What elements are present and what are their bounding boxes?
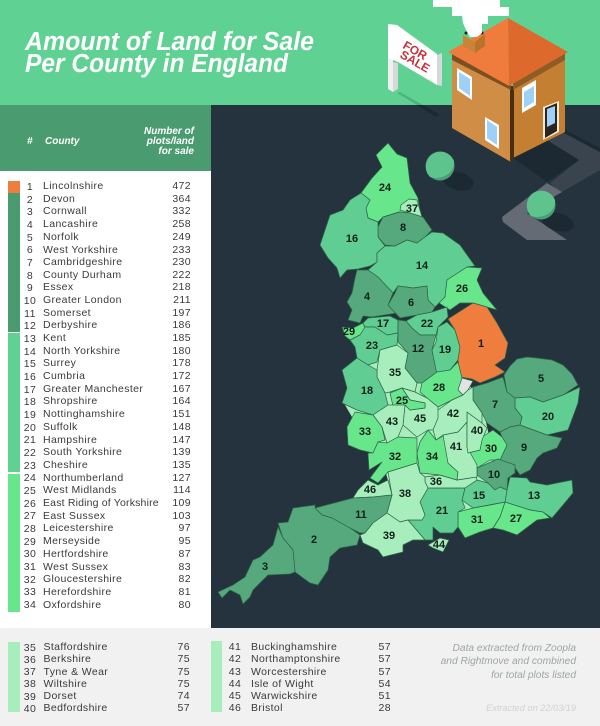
- header band: [0, 0, 600, 105]
- county rows 1 to 34: 97: [179, 522, 191, 534]
- county rows 1 to 34: East Sussex: [43, 510, 106, 522]
- county 31 West Sussex: [458, 502, 505, 538]
- county rows 1 to 34: 364: [172, 193, 191, 205]
- county 4 Lancashire: [347, 270, 397, 323]
- windows and door: [457, 68, 559, 149]
- table header: #: [27, 136, 33, 147]
- county 36 Berkshire: [425, 473, 477, 488]
- Rutland, no data: [458, 378, 473, 395]
- county 8 County Durham: 8: [400, 222, 406, 234]
- county rows 41 to 46: 57: [379, 641, 391, 653]
- county rows 1 to 34: 21: [24, 434, 36, 446]
- footer colour bar right: [211, 641, 222, 712]
- sign lettering: FOR: [401, 38, 430, 63]
- county 8 County Durham: [378, 212, 432, 246]
- county 18 Shropshire: [342, 358, 388, 415]
- county 12 Derbyshire: [398, 320, 437, 383]
- county rows 41 to 46: Northamptonshire: [251, 653, 341, 665]
- county rows 41 to 46: 57: [379, 653, 391, 665]
- county 2 Devon: 2: [311, 534, 317, 546]
- county 43 Worcestershire: [373, 405, 405, 443]
- county rows 1 to 34: 10: [24, 295, 36, 307]
- county 45 Warwickshire: [402, 388, 438, 437]
- county rows 35 to 40: Dorset: [44, 690, 77, 702]
- county 11 Somerset: 11: [355, 509, 367, 521]
- county 39 Dorset: 39: [383, 530, 395, 542]
- county 1 Lincolnshire: 1: [478, 338, 484, 350]
- county 20 Suffolk: [515, 387, 580, 435]
- county 44 Isle of Wight: 44: [433, 539, 446, 551]
- county 29 Merseyside: 29: [343, 326, 355, 338]
- for sale sign: [388, 24, 442, 92]
- county rows 1 to 34: 29: [24, 536, 36, 548]
- county 24 Northumberland: 24: [379, 182, 392, 194]
- county rows 1 to 34: 332: [172, 205, 191, 217]
- county rows 1 to 34: West Midlands: [43, 484, 117, 496]
- county 28 Leicestershire: [420, 362, 463, 407]
- county rows 35 to 40: Staffordshire: [44, 641, 108, 653]
- county rows 1 to 34: 114: [173, 484, 191, 496]
- county 13 Kent: [505, 477, 573, 518]
- county 21 Hampshire: 21: [436, 505, 448, 517]
- county 41 Buckinghamshire: 41: [450, 441, 462, 453]
- table header: County: [45, 136, 80, 147]
- county 12 Derbyshire: 12: [412, 343, 424, 355]
- county 44 Isle of Wight: [428, 538, 449, 552]
- county rows 1 to 34: 164: [172, 395, 191, 407]
- illustration: house with for sale sign: [388, 0, 600, 240]
- county rows 1 to 34: 172: [172, 370, 191, 382]
- county rows 41 to 46: 54: [379, 678, 391, 690]
- county 3 Cornwall: 3: [262, 561, 268, 573]
- county rows 1 to 34: 8: [27, 270, 33, 282]
- county rows 1 to 34: 33: [24, 586, 36, 598]
- county rows 1 to 34: 148: [172, 421, 191, 433]
- county 42 Northamptonshire: 42: [447, 408, 459, 420]
- table header: plots/land: [146, 136, 195, 147]
- county rows 1 to 34: 185: [172, 332, 191, 344]
- county rows 1 to 34: 16: [24, 371, 36, 383]
- county rows 1 to 34: County Durham: [43, 269, 121, 281]
- county 9 Essex: 9: [521, 442, 527, 454]
- county rows 41 to 46: 42: [229, 653, 241, 665]
- county 35 Staffordshire: 35: [389, 367, 401, 379]
- county rows 35 to 40: 75: [178, 678, 190, 690]
- county rows 1 to 34: 222: [172, 269, 191, 281]
- county rows 1 to 34: 30: [24, 548, 36, 560]
- county 9 Essex: [500, 425, 562, 475]
- county 7 Cambridgeshire: [473, 377, 522, 432]
- county 25 West Midlands: [390, 388, 425, 410]
- county rows 1 to 34: 24: [24, 472, 36, 484]
- county rows 1 to 34: 87: [179, 548, 191, 560]
- county rows 1 to 34: 258: [172, 218, 191, 230]
- county rows 41 to 46: Buckinghamshire: [251, 641, 337, 653]
- county 1 Lincolnshire: [448, 303, 508, 383]
- county 26 East Riding of Yorkshire: [439, 267, 497, 310]
- county 25 West Midlands: 25: [396, 395, 408, 407]
- county 22 South Yorkshire: [406, 307, 448, 335]
- county 3 Cornwall: [218, 527, 295, 604]
- county rows 1 to 34: 127: [172, 472, 191, 484]
- table header: [0, 105, 211, 171]
- county rows 1 to 34: 6: [27, 244, 33, 256]
- county rows 1 to 34: Cheshire: [43, 459, 88, 471]
- county 21 Hampshire: [408, 488, 465, 540]
- county 13 Kent: 13: [528, 490, 540, 502]
- county rows 1 to 34: 3: [27, 206, 33, 218]
- county 28 Leicestershire: 28: [433, 382, 445, 394]
- title: Amount of Land for Sale: [24, 28, 314, 56]
- county rows 35 to 40: 36: [24, 654, 36, 666]
- county rows 41 to 46: 51: [379, 690, 391, 702]
- county rows 35 to 40: 75: [178, 666, 190, 678]
- county rows 35 to 40: 39: [24, 691, 36, 703]
- county rows 1 to 34: West Yorkshire: [43, 244, 118, 256]
- county rows 1 to 34: 186: [172, 319, 191, 331]
- county rows 1 to 34: 80: [179, 599, 191, 611]
- county rows 1 to 34: 18: [24, 396, 36, 408]
- table header: for sale: [158, 146, 194, 157]
- extraction date: Extracted on 22/03/19: [486, 703, 576, 713]
- county rows 1 to 34: Hertfordshire: [43, 548, 109, 560]
- data source note: for total plots listed: [491, 670, 576, 681]
- county 41 Buckinghamshire: [443, 422, 477, 480]
- county 19 Nottinghamshire: 19: [439, 344, 451, 356]
- county rows 1 to 34: 230: [172, 256, 191, 268]
- county rows 1 to 34: 25: [24, 485, 36, 497]
- county rows 1 to 34: West Sussex: [43, 561, 109, 573]
- county rows 1 to 34: 103: [172, 510, 191, 522]
- county rows 1 to 34: 23: [24, 460, 36, 472]
- county rows 1 to 34: 4: [27, 219, 33, 231]
- county 29 Merseyside: [342, 323, 365, 340]
- county rows 1 to 34: Shropshire: [43, 395, 98, 407]
- county 46 Bristol: [353, 480, 392, 498]
- county rows 1 to 34: Northumberland: [43, 472, 124, 484]
- county rows 1 to 34: Oxfordshire: [43, 599, 101, 611]
- house shadow: [513, 130, 600, 182]
- smoke: [433, 0, 509, 37]
- house walls: [452, 52, 565, 162]
- county rows 41 to 46: Isle of Wight: [251, 678, 314, 690]
- county 43 Worcestershire: 43: [386, 416, 398, 428]
- county 23 Cheshire: 23: [366, 340, 378, 352]
- county 34 Oxfordshire: 34: [426, 451, 439, 463]
- county 10 Greater London: [477, 459, 515, 490]
- county rows 1 to 34: Somerset: [43, 307, 91, 319]
- county 37 Tyne and Wear: 37: [406, 203, 418, 215]
- county rows 35 to 40: [24, 641, 190, 715]
- county 14 North Yorkshire: 14: [416, 260, 429, 272]
- county rows 1 to 34: 17: [24, 384, 36, 396]
- county rows 1 to 34: 15: [24, 358, 36, 370]
- county rows 1 to 34: Lancashire: [43, 218, 98, 230]
- county rows 1 to 34: Herefordshire: [43, 586, 112, 598]
- county rows 41 to 46: 57: [379, 666, 391, 678]
- county 15 Surrey: [462, 480, 507, 508]
- county 16 Cumbria: 16: [346, 233, 358, 245]
- county rows 1 to 34: 180: [172, 345, 191, 357]
- county 27 East Sussex: 27: [510, 513, 522, 525]
- county 36 Berkshire: 36: [430, 476, 442, 488]
- county rows 35 to 40: 40: [24, 703, 36, 715]
- county rows 35 to 40: 37: [24, 666, 36, 678]
- county 24 Northumberland: [361, 143, 421, 222]
- county rows 35 to 40: Berkshire: [44, 653, 91, 665]
- county 46 Bristol: 46: [364, 484, 376, 496]
- county rows 1 to 34: 82: [179, 573, 191, 585]
- county 30 Hertfordshire: 30: [485, 443, 497, 455]
- county 22 South Yorkshire: 22: [421, 318, 433, 330]
- county 4 Lancashire: 4: [364, 291, 371, 303]
- county rows 1 to 34: 14: [24, 346, 36, 358]
- county rows 1 to 34: 178: [172, 357, 191, 369]
- county rows 1 to 34: 211: [173, 294, 191, 306]
- county rows 1 to 34: 249: [172, 231, 191, 243]
- county rows 35 to 40: Tyne & Wear: [44, 666, 108, 678]
- sign shadow: [397, 92, 440, 117]
- county rows 1 to 34: Kent: [43, 332, 66, 344]
- county 23 Cheshire: [350, 327, 398, 365]
- county rows 1 to 34: 81: [179, 586, 191, 598]
- county 42 Northamptonshire: [433, 387, 482, 440]
- county 32 Gloucestershire: 32: [389, 451, 401, 463]
- county rows 35 to 40: 76: [178, 641, 190, 653]
- county rows 1 to 34: 5: [27, 232, 33, 244]
- county rows 1 to 34: 135: [172, 459, 191, 471]
- county rows 41 to 46: 41: [229, 641, 241, 653]
- county rows 1 to 34: 233: [172, 244, 191, 256]
- county rows 41 to 46: 45: [229, 690, 241, 702]
- county rows 1 to 34: Devon: [43, 193, 75, 205]
- county rows 1 to 34: 7: [27, 257, 33, 269]
- county 37 Tyne and Wear: [400, 199, 422, 217]
- county rows 1 to 34: 1: [27, 181, 33, 193]
- county rows 1 to 34: Suffolk: [43, 421, 78, 433]
- dark map background: [211, 105, 600, 628]
- county rows 35 to 40: 57: [178, 702, 190, 714]
- county 40 Bedfordshire: 40: [471, 425, 483, 437]
- county 11 Somerset: [315, 495, 392, 533]
- county rows 1 to 34: 139: [172, 446, 191, 458]
- county rows 1 to 34: Surrey: [43, 357, 77, 369]
- roof: [448, 18, 568, 86]
- county rows 1 to 34: Essex: [43, 281, 74, 293]
- county rows 1 to 34: 218: [172, 281, 191, 293]
- county 15 Surrey: 15: [473, 490, 485, 502]
- county rows 1 to 34: 472: [172, 180, 191, 192]
- county rows 41 to 46: Bristol: [251, 702, 283, 714]
- county 6 West Yorkshire: 6: [408, 297, 414, 309]
- county rows 41 to 46: 44: [229, 678, 241, 690]
- county rows 1 to 34: 95: [179, 535, 191, 547]
- county rows 1 to 34: 28: [24, 523, 36, 535]
- table header: Number of: [144, 126, 196, 137]
- data source note: and Rightmove and combined: [441, 656, 576, 667]
- county rows 35 to 40: Bedfordshire: [44, 702, 108, 714]
- sign lettering: SALE: [398, 47, 432, 76]
- county rows 1 to 34: East Riding of Yorkshire: [43, 497, 159, 509]
- title: Per County in England: [25, 50, 289, 78]
- garden path: [502, 132, 600, 240]
- county 45 Warwickshire: 45: [414, 413, 426, 425]
- county rows 1 to 34: 26: [24, 498, 36, 510]
- county 32 Gloucestershire: [368, 437, 417, 483]
- trees: [426, 152, 576, 235]
- county rows 1 to 34: 147: [172, 434, 191, 446]
- county rows 1 to 34: Greater London: [43, 294, 122, 306]
- footer panel: ranks 35 to 46 and notes: [0, 628, 600, 726]
- county rows 1 to 34: 11: [24, 308, 36, 320]
- county 27 East Sussex: [493, 502, 550, 535]
- county rows 1 to 34: [24, 180, 191, 611]
- rank colour bars: [8, 181, 20, 612]
- county rows 1 to 34: 9: [27, 282, 33, 294]
- county 33 Herefordshire: [347, 412, 385, 453]
- county 34 Oxfordshire: [417, 430, 458, 480]
- county rows 1 to 34: 109: [172, 497, 191, 509]
- county rows 1 to 34: Norfolk: [43, 231, 79, 243]
- title: [24, 28, 314, 78]
- county 18 Shropshire: 18: [361, 385, 373, 397]
- county rows 35 to 40: Wiltshire: [44, 678, 87, 690]
- county rows 1 to 34: 197: [172, 307, 191, 319]
- county 16 Cumbria: [320, 193, 385, 278]
- county rows 1 to 34: Greater Manchester: [43, 383, 143, 395]
- data source note: Data extracted from Zoopla: [453, 643, 576, 654]
- county rows 1 to 34: Leicestershire: [43, 522, 114, 534]
- county rows 1 to 34: 22: [24, 447, 36, 459]
- county rows 1 to 34: 83: [179, 561, 191, 573]
- county rows 1 to 34: 31: [24, 561, 36, 573]
- county rows 41 to 46: 43: [229, 666, 241, 678]
- data source note: [441, 643, 576, 681]
- county 31 West Sussex: 31: [471, 514, 483, 526]
- county rows 41 to 46: Warwickshire: [251, 690, 318, 702]
- county rows 1 to 34: Merseyside: [43, 535, 100, 547]
- map of England: [218, 143, 580, 604]
- county rows 1 to 34: Lincolnshire: [43, 180, 104, 192]
- county rows 1 to 34: North Yorkshire: [43, 345, 120, 357]
- county rows 1 to 34: Cornwall: [43, 205, 87, 217]
- county rows 35 to 40: 74: [178, 690, 190, 702]
- county rows 1 to 34: Nottinghamshire: [43, 408, 125, 420]
- table panel: ranks 1 to 34: [0, 171, 211, 628]
- county 38 Wiltshire: [387, 463, 428, 522]
- county rows 41 to 46: Worcestershire: [251, 666, 327, 678]
- county 10 Greater London: 10: [488, 469, 500, 481]
- county 33 Herefordshire: 33: [359, 426, 371, 438]
- county 17 Greater Manchester: [363, 316, 398, 335]
- county rows 1 to 34: 20: [24, 422, 36, 434]
- county 40 Bedfordshire: [467, 412, 487, 453]
- county rows 1 to 34: South Yorkshire: [43, 446, 122, 458]
- county 35 Staffordshire: [377, 345, 417, 393]
- county rows 1 to 34: Cumbria: [43, 370, 85, 382]
- county 20 Suffolk: 20: [542, 411, 554, 423]
- county rows 1 to 34: Derbyshire: [43, 319, 98, 331]
- county rows 1 to 34: 167: [172, 383, 191, 395]
- county rows 1 to 34: 32: [24, 574, 36, 586]
- county 5 Norfolk: [504, 357, 578, 402]
- county rows 1 to 34: 27: [24, 510, 36, 522]
- base underlay filling county seams: [345, 320, 505, 520]
- county rows 1 to 34: 34: [24, 599, 36, 611]
- county rows 1 to 34: 151: [172, 408, 191, 420]
- county rows 41 to 46: [229, 641, 391, 714]
- county rows 1 to 34: 19: [24, 409, 36, 421]
- county rows 41 to 46: 28: [379, 702, 391, 714]
- county 38 Wiltshire: 38: [399, 488, 411, 500]
- county rows 1 to 34: Hampshire: [43, 434, 97, 446]
- county rows 35 to 40: 75: [178, 653, 190, 665]
- county rows 1 to 34: 12: [24, 320, 36, 332]
- county rows 35 to 40: 35: [24, 642, 36, 654]
- county 19 Nottinghamshire: [432, 322, 460, 375]
- county rows 1 to 34: 2: [27, 194, 33, 206]
- county rows 1 to 34: 13: [24, 333, 36, 345]
- county 6 West Yorkshire: [388, 286, 435, 318]
- county 7 Cambridgeshire: 7: [492, 399, 498, 411]
- county 30 Hertfordshire: [468, 430, 507, 468]
- county 5 Norfolk: 5: [538, 373, 544, 385]
- county 39 Dorset: [360, 513, 425, 557]
- county 26 East Riding of Yorkshire: 26: [456, 283, 468, 295]
- footer colour bar left: [8, 642, 20, 712]
- county 17 Greater Manchester: 17: [377, 318, 389, 330]
- chimney: [463, 32, 485, 53]
- county rows 35 to 40: 38: [24, 678, 36, 690]
- county 14 North Yorkshire: [368, 232, 475, 307]
- county rows 41 to 46: 46: [229, 702, 241, 714]
- county rows 1 to 34: Gloucestershire: [43, 573, 122, 585]
- county 2 Devon: [278, 505, 360, 585]
- county rows 1 to 34: Cambridgeshire: [43, 256, 122, 268]
